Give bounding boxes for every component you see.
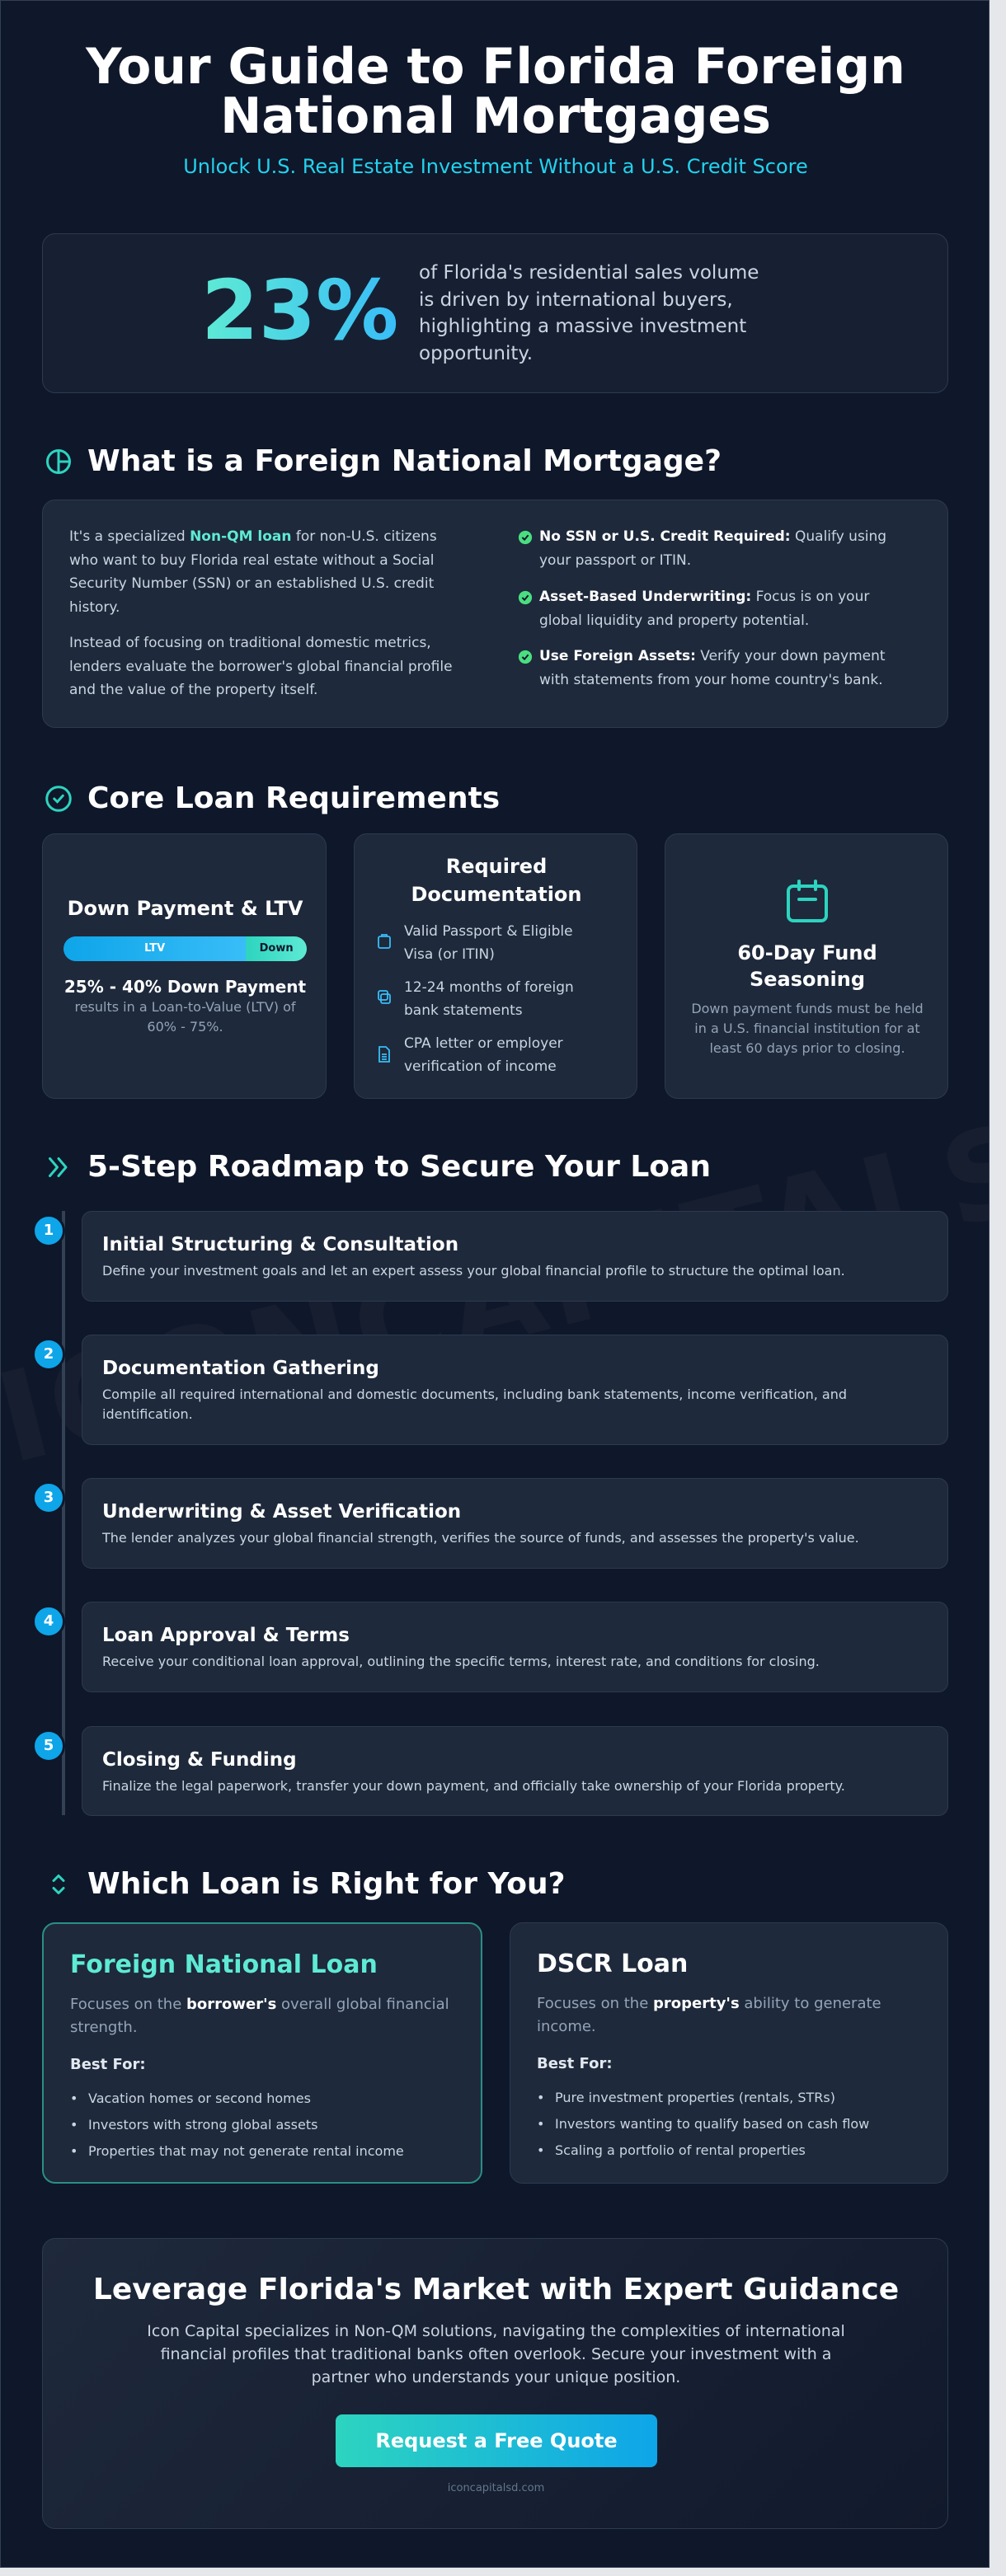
icon: pie chart (46, 449, 71, 474)
icon: up-down chevrons (52, 1875, 65, 1894)
doc list: bank statements (404, 1002, 523, 1019)
LTV bar: LTV (144, 942, 165, 955)
panel: DSCR loan: Focuses on the property's ability to generate (537, 1995, 881, 2012)
text: definition (69, 528, 453, 698)
panel: DSCR loan: Pure investment properties (rentals, STRs) (555, 2090, 835, 2105)
CTA text: Icon Capital specializes in Non-QM solutions, navigating the complexities of international (147, 2322, 845, 2340)
list: benefits: Use Foreign Assets: Verify your down payment (539, 648, 886, 664)
heading: roadmap: 5-Step Roadmap to Secure Your Loan (87, 1150, 711, 1184)
doc list: Visa (or ITIN) (404, 946, 495, 963)
panel: DSCR loan: Scaling a portfolio of rental properties (555, 2142, 806, 2158)
panel: foreign national loan (42, 1922, 482, 2184)
list: benefits: your passport or ITIN. (539, 552, 691, 569)
step 4: Receive your conditional loan approval, outlining the specific terms, interest rate, and conditions for closing. (102, 1654, 820, 1669)
panel: CTA (42, 2238, 948, 2529)
step 5: 5 (44, 1737, 54, 1754)
stat number: 23% (201, 262, 398, 359)
panel: fund seasoning (665, 833, 948, 1099)
subtitle: Unlock U.S. Real Estate Investment Without a U.S. Credit Score (183, 155, 808, 178)
step 4: 4 (44, 1612, 54, 1630)
stat text: opportunity. (419, 343, 533, 364)
panel: DSCR loan: income. (537, 2018, 596, 2035)
panel: what is (42, 500, 948, 728)
step 1 (35, 1211, 948, 1302)
step 4: Loan Approval & Terms (102, 1625, 350, 1646)
stat text (419, 262, 759, 364)
step 2: Compile all required international and domestic documents, including bank statements, income verification, and (102, 1387, 847, 1402)
stat text: highlighting a massive investment (419, 316, 746, 337)
panel: down payment (42, 833, 327, 1099)
card title: Documentation (411, 883, 582, 906)
step 5: Closing & Funding (102, 1749, 297, 1771)
step 3: The lender analyzes your global financial strength, verifies the source of funds, and assesses the property's value. (102, 1530, 859, 1546)
down payment text: 25% - 40% Down Payment (64, 977, 306, 997)
text: definition: lenders evaluate the borrower's global financial profile (69, 658, 453, 674)
card title: Required (446, 855, 547, 878)
heading: core requirements: Core Loan Requirements (87, 781, 500, 815)
card title: 60-Day Fund (737, 941, 877, 964)
step 2: Documentation Gathering (102, 1358, 379, 1379)
panel: down payment: results in a Loan-to-Value (LTV) of (74, 999, 296, 1015)
text: definition: history. (69, 598, 120, 615)
heading: which loan: Which Loan is Right for You? (87, 1867, 566, 1901)
text: definition: and the value of the property itself. (69, 682, 317, 698)
card title: Down Payment & LTV (68, 897, 303, 920)
stat text: of Florida's residential sales volume (419, 262, 759, 284)
step 1: 1 (44, 1222, 54, 1239)
title: National Mortgages (220, 87, 771, 145)
card text: in a U.S. financial institution for at (694, 1021, 920, 1036)
step 4 (35, 1602, 948, 1692)
doc list: CPA letter or employer (404, 1035, 563, 1052)
icon: check circle (45, 786, 72, 812)
url: iconcapitalsd.com (448, 2482, 544, 2494)
list: benefits: with statements from your home country's bank. (539, 671, 883, 687)
text: definition: Security Number (SSN) or an established U.S. credit (69, 575, 434, 592)
panel: down payment: 60% - 75%. (147, 1019, 223, 1035)
panel: DSCR loan: Best For: (537, 2055, 613, 2072)
panel: foreign national loan: strength. (70, 2019, 138, 2036)
panel: DSCR loan: Investors wanting to qualify based on cash flow (555, 2116, 869, 2132)
CTA text: financial profiles that traditional banks often overlook. Secure your investment with a (161, 2345, 831, 2363)
panel: stat (42, 233, 948, 393)
doc list: 12-24 months of foreign (404, 979, 574, 996)
step 5 (35, 1726, 948, 1816)
LTV bar (63, 936, 307, 961)
card text: Down payment funds must be held (691, 1001, 924, 1016)
list: benefits (518, 528, 886, 687)
panel: foreign national loan: Vacation homes or second homes (88, 2090, 311, 2106)
list: benefits: Asset-Based Underwriting: Focus is on your (539, 589, 869, 605)
CTA text: partner who understands your unique position. (312, 2368, 680, 2386)
timeline line (62, 1211, 65, 1815)
step 2 (35, 1335, 948, 1445)
heading: what is: What is a Foreign National Mortgage? (87, 444, 722, 478)
icon: calendar (787, 880, 828, 922)
title: Your Guide to Florida Foreign (86, 38, 905, 96)
button: Request a Free Quote (375, 2429, 618, 2452)
text: definition: who want to buy Florida real estate without a Social (69, 552, 434, 569)
card title (737, 941, 877, 991)
doc list (378, 923, 574, 1075)
CTA text (147, 2322, 845, 2386)
list: benefits: global liquidity and property potential. (539, 612, 809, 628)
card title (411, 855, 582, 906)
step 3: 3 (44, 1489, 54, 1506)
stat text: is driven by international buyers, (419, 289, 733, 310)
card text: least 60 days prior to closing. (709, 1040, 905, 1056)
step 1: Define your investment goals and let an expert assess your global financial profile to structure the optimal loan. (102, 1263, 845, 1279)
step 3 (35, 1478, 948, 1569)
list: benefits: No SSN or U.S. Credit Required: Qualify using (539, 528, 886, 545)
title (86, 38, 905, 145)
step 2: 2 (44, 1345, 54, 1363)
panel: foreign national loan: Focuses on the borrower's overall global financial (70, 1996, 449, 2013)
text: definition: Instead of focusing on traditional domestic metrics, (69, 635, 431, 651)
doc list: verification of income (404, 1058, 557, 1075)
panel: DSCR loan (510, 1922, 948, 2184)
step 3: Underwriting & Asset Verification (102, 1501, 461, 1523)
doc list: Valid Passport & Eligible (404, 923, 573, 940)
CTA title: Leverage Florida's Market with Expert Guidance (93, 2273, 899, 2306)
panel: foreign national loan: Properties that may not generate rental income (88, 2143, 404, 2159)
card title: Seasoning (750, 968, 865, 991)
panel: foreign national loan: Investors with strong global assets (88, 2117, 317, 2133)
panel: foreign national loan: Foreign National Loan (70, 1950, 378, 1979)
button (336, 2414, 657, 2467)
step 2: identification. (102, 1406, 193, 1422)
LTV bar: Down (260, 942, 294, 955)
panel: foreign national loan: Best For: (70, 2056, 146, 2073)
step 5: Finalize the legal paperwork, transfer your down payment, and officially take ownership of your Florida property. (102, 1778, 845, 1794)
step 1: Initial Structuring & Consultation (102, 1234, 458, 1255)
panel: DSCR loan: DSCR Loan (537, 1950, 688, 1978)
card text (691, 1001, 924, 1056)
panel: documentation (354, 833, 637, 1099)
text: definition: It's a specialized Non-QM loan for non-U.S. citizens (69, 528, 437, 545)
icon: double chevron (48, 1157, 68, 1177)
